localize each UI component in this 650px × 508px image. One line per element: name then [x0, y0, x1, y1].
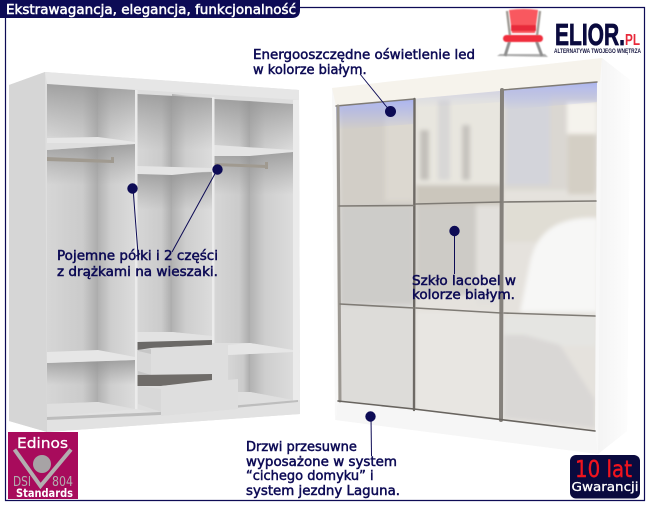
led glow	[336, 100, 414, 125]
leader line	[454, 231, 456, 274]
badge: 10 year warranty: Gwarancji	[572, 480, 638, 494]
leader lines	[133, 170, 217, 254]
callout: lacobel glass: kolorze białym.	[412, 288, 515, 303]
badge: Edinos standards: 804	[52, 475, 73, 490]
badge: Edinos standards: Edinos	[17, 436, 68, 452]
markers	[127, 183, 138, 194]
callout: led lighting	[253, 48, 475, 117]
callout: shelves and rods: z drążkami na wieszaki.	[57, 265, 218, 280]
reflected room	[336, 81, 598, 432]
callout: led lighting: w kolorze białym.	[253, 63, 367, 78]
callout: sliding doors	[246, 411, 400, 499]
badge: 10 year warranty	[570, 455, 640, 498]
right wardrobe: glass doors	[332, 58, 630, 454]
plinth	[47, 400, 300, 432]
outer body	[9, 72, 300, 432]
badge: 10 year warranty: 10 lat	[575, 457, 632, 483]
title bar: Ekstrawagancja, elegancja, funkcjonalność	[6, 3, 296, 18]
dividers	[135, 90, 300, 410]
caption: Energooszczędne oświetlenie led	[253, 48, 475, 63]
logo: Elior.pl	[497, 9, 641, 57]
plinth	[336, 401, 598, 454]
compartment 3	[214, 99, 293, 400]
left wardrobe: open interior	[9, 72, 300, 432]
domain suffix: PL	[625, 32, 640, 49]
wardrobe body	[332, 58, 630, 454]
marker	[385, 106, 396, 117]
caption: Pojemne półki i 2 części	[57, 249, 218, 264]
hanging rods	[47, 157, 268, 169]
marker	[365, 411, 376, 422]
top panel	[45, 72, 299, 100]
compartment 1	[47, 84, 135, 410]
callout: lacobel glass	[412, 226, 516, 303]
badge: Edinos standards	[8, 432, 78, 500]
caption: Szkło lacobel w	[412, 274, 516, 289]
caption: Drzwi przesuwne	[246, 440, 357, 455]
callout: sliding doors: wyposażone w system	[246, 455, 397, 470]
badge: Edinos standards: Standards	[16, 486, 73, 500]
drawers	[138, 340, 238, 416]
leader line	[370, 417, 372, 456]
shelves	[47, 137, 293, 417]
marker	[449, 226, 460, 236]
door rails	[336, 82, 597, 431]
callout: sliding doors: system jezdny Laguna.	[246, 484, 400, 499]
badge: Edinos standards: DSI	[13, 475, 31, 490]
callout: sliding doors: “cichego domyku” i	[246, 469, 374, 484]
leader line	[360, 74, 390, 111]
compartment 2	[138, 94, 212, 336]
icon: red chair	[497, 9, 548, 57]
callout: shelves and rods	[57, 164, 223, 280]
